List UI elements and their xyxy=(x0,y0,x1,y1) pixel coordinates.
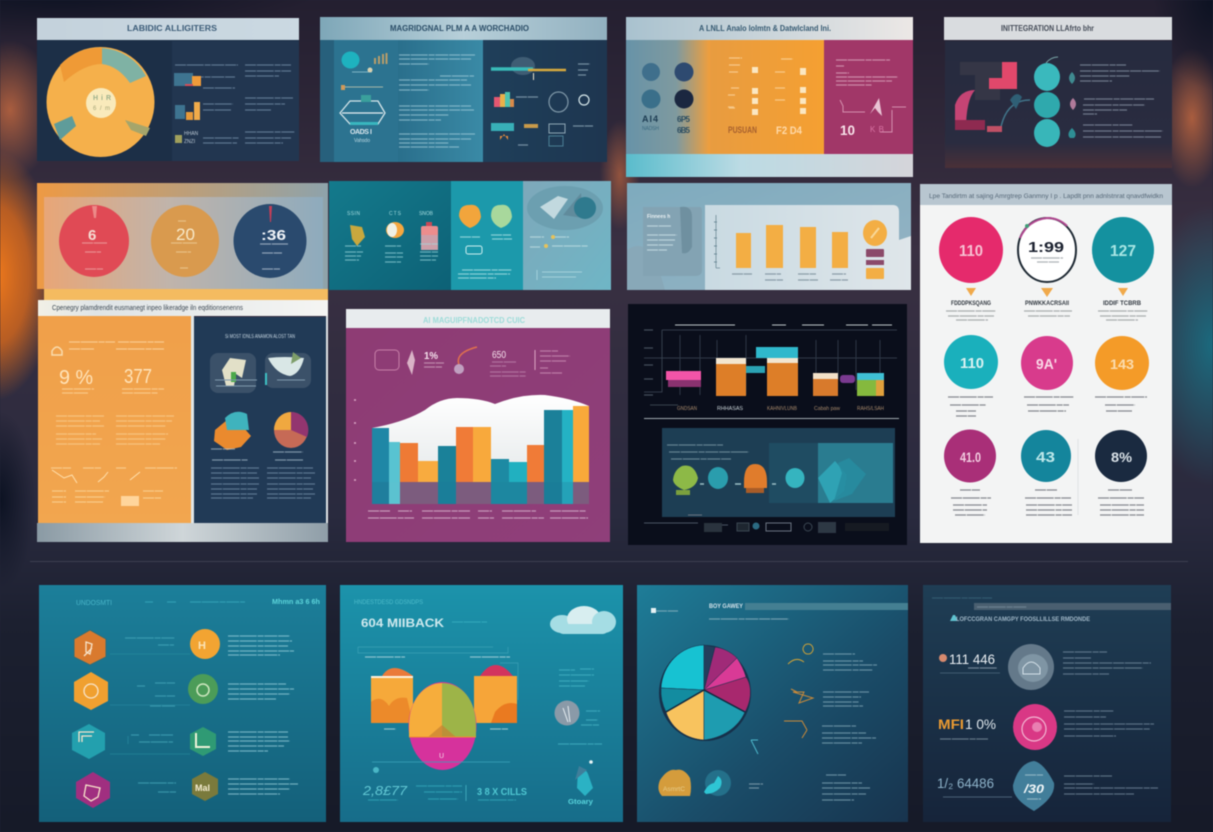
text block: orange column xyxy=(728,58,806,137)
stat: 1:99 ring: 1:99 xyxy=(1028,239,1064,256)
panel: teal report xyxy=(320,17,607,162)
icons: second column: H xyxy=(198,640,206,652)
stat: 110 pink: 110 xyxy=(959,243,983,260)
stat: MFI 11 0%: 1 0% xyxy=(965,716,996,732)
heading: purple panel xyxy=(346,309,610,328)
chart: area and bars xyxy=(354,395,589,518)
stat: 143 orange: 143 xyxy=(1110,356,1134,372)
stat: 111 446 xyxy=(939,651,1000,673)
stat: 127 teal: 127 xyxy=(1110,243,1136,260)
stat: 64486: 1/₂ 64486 xyxy=(937,775,994,791)
text block: magenta column: KB xyxy=(870,125,884,134)
chart: large yellow pie: HiR xyxy=(93,95,111,102)
stat: 110 teal xyxy=(944,335,998,416)
sidebar: stats card: Finnees h xyxy=(647,214,670,220)
icons: left column xyxy=(340,52,388,144)
icon: teal hexagon xyxy=(72,724,105,759)
stat: 1:99 ring xyxy=(1018,218,1076,316)
heading: hexagon panel xyxy=(76,599,320,607)
chart: large yellow pie xyxy=(46,47,154,157)
text block: body column xyxy=(399,55,475,147)
heading: panel four xyxy=(944,17,1172,40)
icons: teal column xyxy=(345,211,438,262)
chart: overlapping shapes xyxy=(358,647,518,770)
legend rows: HHAN xyxy=(184,131,199,137)
chart: dark bars: RHHASAS xyxy=(717,406,743,412)
charts: navy column: Si MOST IDNLS ANAMON ALOST TAN xyxy=(225,334,295,340)
stat: 143 orange xyxy=(1095,336,1149,411)
icons: bottom blobs: AsmrtC xyxy=(663,786,685,793)
icons: left column: Vahsdo xyxy=(354,138,370,144)
heading: white panel: Lpe Tandirtm at sajing Amrgtrep Ganmny I p . Lapdlt pnn adnlstnrat qnavdfwidkn xyxy=(929,193,1163,200)
text block: connectors and captions xyxy=(110,636,298,794)
circle stat: red xyxy=(59,205,129,277)
icons: second column xyxy=(188,629,220,801)
heading: panel one xyxy=(37,18,299,40)
icons: pie callouts xyxy=(751,644,813,754)
heading: bubble panel xyxy=(354,599,487,630)
icon: translucent shapes xyxy=(527,186,603,280)
heading: dark stat panel xyxy=(932,598,1171,623)
stat: 110 teal: 110 xyxy=(960,355,984,372)
chart: yellow bars xyxy=(714,215,848,280)
stats: orange column: 377 xyxy=(124,366,152,388)
icon: coin and stack xyxy=(863,220,887,279)
text block: magenta column: 10 xyxy=(840,122,855,138)
stats row: 650 xyxy=(492,350,506,361)
stats bottom xyxy=(362,762,527,801)
icon: amber hexagon xyxy=(74,672,108,710)
stats bottom: 2,8£77 xyxy=(362,783,408,798)
panel: hexagon list xyxy=(39,585,326,822)
icon: orange hexagon xyxy=(74,630,106,665)
icon: purple hexagon xyxy=(76,772,110,808)
panel: integration dark xyxy=(944,17,1172,168)
heading: panel four: INITTEGRATION LLAfrto bhr xyxy=(1001,24,1094,33)
heading: hexagon panel: UNDOSMTI xyxy=(76,600,112,607)
icons: hexagon glyphs xyxy=(79,642,100,801)
panel: dark dashboard xyxy=(628,304,907,545)
panel: three circles orange xyxy=(37,183,328,300)
heading: hexagon panel: Mhmn a3 6 6h xyxy=(272,599,320,606)
stat: 9A pink: 9A' xyxy=(1036,356,1057,373)
stats row: 1% xyxy=(424,351,438,362)
stat: MFI 11 0% xyxy=(938,716,996,739)
text block: labelled rows xyxy=(1068,65,1163,138)
circle stat: navy xyxy=(234,204,306,278)
heading: bubble panel: 604 MIIBACK xyxy=(361,616,444,630)
circle stat: orange xyxy=(151,205,219,277)
panel: white stats xyxy=(920,184,1172,543)
heading: bubble panel: HNDESTDESD GDSNDPS xyxy=(354,599,424,606)
legend rows xyxy=(174,65,295,145)
stat: 8% navy: 8% xyxy=(1111,449,1133,465)
stat: 9A pink xyxy=(1021,336,1074,411)
circle stat: red: 6 xyxy=(88,227,96,244)
stat: 410 purple: 41.0 xyxy=(960,449,981,465)
chart: teal node diagram xyxy=(955,57,1060,147)
panel: purple area and bar chart xyxy=(346,309,610,542)
icons: second column: Mal xyxy=(195,783,210,793)
icons: right charts xyxy=(491,57,593,146)
text block: orange column: F2 D4 xyxy=(776,125,803,137)
icon: magenta blob xyxy=(1013,704,1057,750)
panel: flow diagram xyxy=(662,428,895,517)
panel: orange and navy report xyxy=(37,300,328,542)
chart: overlapping shapes: U xyxy=(439,753,444,760)
heading: dark stat panel: LOFCCGRAN CAMGPY FOOSLLILLSE RMDONDE xyxy=(956,617,1090,623)
icon: blue blob xyxy=(1013,761,1054,811)
chart: dark bars: GNDSAN xyxy=(677,406,697,412)
panel: bar chart light xyxy=(627,183,911,290)
stat: 410 purple xyxy=(944,430,996,515)
heading: pie panel: BOY GAWEY xyxy=(709,604,743,610)
sidebar: stats card xyxy=(643,207,702,276)
circle stat: navy: :36 xyxy=(261,227,286,244)
heading: purple panel: AI MAGUIPFNADOTCD CUIC xyxy=(423,316,525,325)
chart: dark bars: Cabah paw xyxy=(814,406,840,412)
icons: hearts column xyxy=(458,205,512,278)
text block: stat descriptions xyxy=(1063,652,1158,794)
chart: pie xyxy=(659,645,751,741)
stat: 43 teal: 43 xyxy=(1036,449,1055,466)
icons: circle grid: NADSH xyxy=(642,126,659,132)
panel: three-colour report xyxy=(626,17,913,177)
text block: magenta column xyxy=(836,60,906,138)
stat: 127 teal xyxy=(1092,217,1154,320)
panel: pie chart xyxy=(637,585,908,822)
chart: large yellow pie: 6/m xyxy=(93,106,110,112)
stat: 111 446: 111 446 xyxy=(949,651,995,667)
icons: left column: OADS I xyxy=(350,129,372,136)
stat: 43 teal xyxy=(1021,430,1072,515)
heading: panel three xyxy=(626,17,913,40)
legend rows: ZNZI xyxy=(184,139,195,145)
heading: pie panel xyxy=(651,603,908,619)
icons: teal column: SNOB xyxy=(419,211,434,217)
chart: dark bars: RAHS/LSAH xyxy=(857,406,884,412)
right icons: Gtoary xyxy=(568,799,593,806)
stats: orange column xyxy=(51,342,177,506)
icon: gray blob xyxy=(1008,644,1054,690)
icons: circle grid: 6P5 xyxy=(677,115,691,124)
stat: 1:99 ring: PNWKKACRSAII xyxy=(1025,301,1069,307)
icon: blue blob: /30 xyxy=(1023,782,1044,796)
stat: 110 pink: FDDDPKSQANG xyxy=(951,301,991,307)
circle stat: orange: 20 xyxy=(176,225,195,244)
panel: teal bubble chart xyxy=(340,585,623,822)
icons: circle grid: 6B5 xyxy=(677,126,691,135)
panel: donut overview xyxy=(37,18,299,161)
stat: 8% navy xyxy=(1095,430,1147,515)
icons: circle grid: AI4 xyxy=(642,114,658,124)
right icons xyxy=(554,669,602,806)
charts: navy column xyxy=(210,334,315,498)
icons: circle grid xyxy=(642,62,694,135)
heading: report strip xyxy=(38,300,328,316)
heading: panel two: MAGRIDGNAL PLM A A WORCHADIO xyxy=(390,24,529,33)
stats row xyxy=(375,347,570,376)
stats bottom: 3 8 X CILLS xyxy=(477,787,527,798)
chart: dark bars: KAHNIVLUNB xyxy=(767,406,797,412)
panel: dark stat list xyxy=(923,585,1171,822)
text block: orange column: PUSUAN xyxy=(728,125,757,135)
text block: pie callouts xyxy=(822,654,877,800)
heading: panel one: LABIDIC ALLIGITERS xyxy=(127,24,218,33)
chart: dark bars xyxy=(644,325,899,418)
stats: orange column: 9 % xyxy=(59,367,93,389)
stat: 110 pink xyxy=(939,217,1003,320)
heading: panel two xyxy=(320,17,607,40)
stat: 64486 xyxy=(937,775,1012,797)
icons: bottom blobs xyxy=(658,770,763,796)
stat: 127 teal: IDDIF TCBRB xyxy=(1103,301,1142,307)
heading: panel three: A LNLL Analo lolmtn & Datwlcland Ini. xyxy=(699,24,831,33)
icon: cloud xyxy=(550,606,616,634)
panel: teal tri-column xyxy=(329,181,611,290)
icons: teal column: SSIN xyxy=(347,211,360,217)
heading: white panel xyxy=(920,184,1172,205)
heading: report strip: Cpenegry plamdrendit eusmanegt inpeo likeradge iln eqditionsenenns xyxy=(52,305,243,312)
control strip xyxy=(644,515,889,533)
icons: teal column: CTS xyxy=(389,211,402,217)
stat: MFI 11 0%: MFI xyxy=(938,716,964,732)
